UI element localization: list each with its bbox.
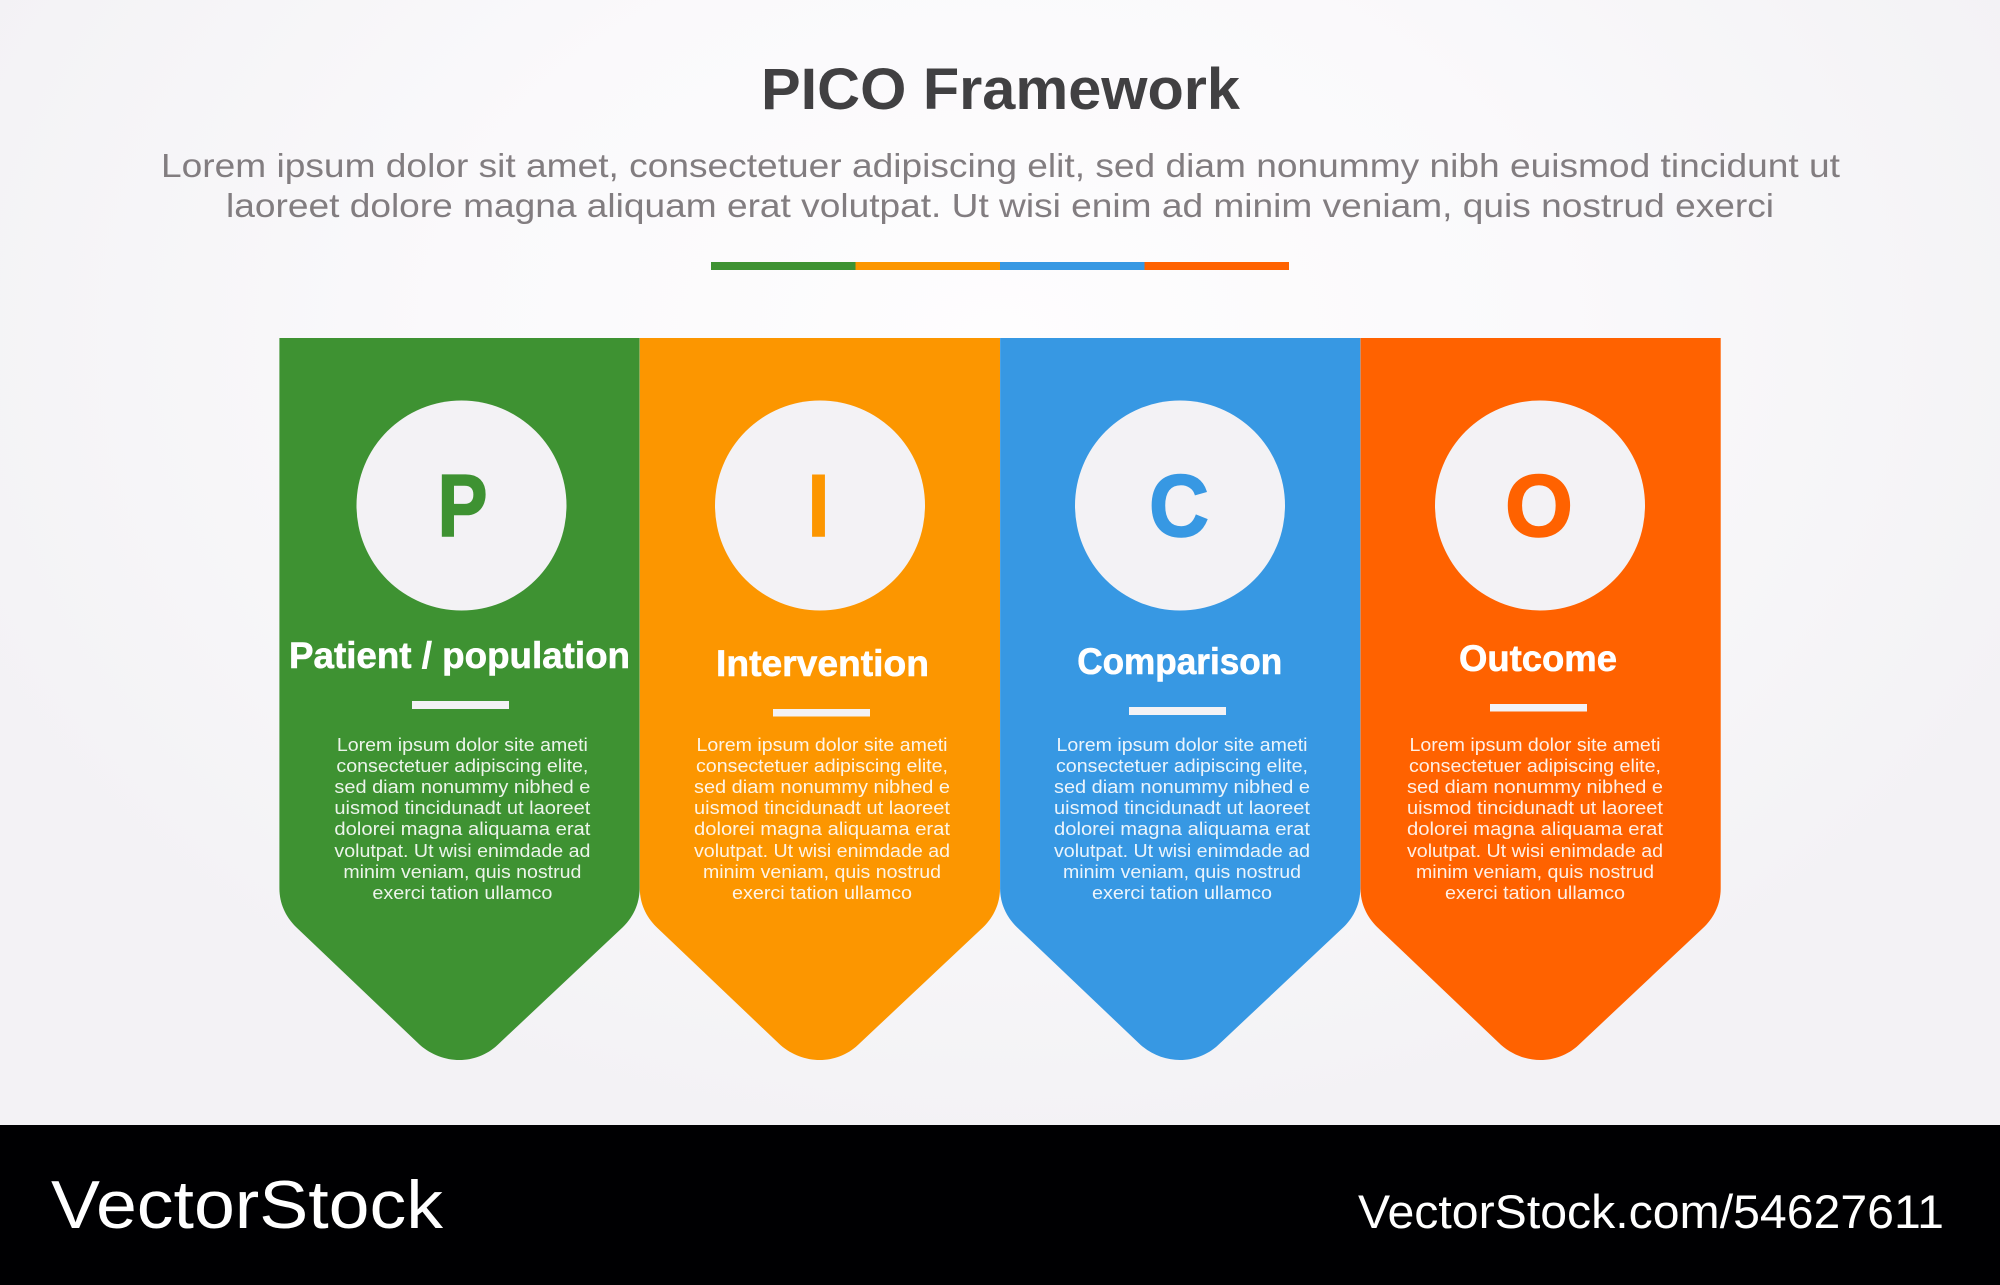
title: PICO Framework <box>761 57 1241 122</box>
heading: Patient / population: Patient / population <box>289 635 630 676</box>
body text: uismod tincidunadt ut laoreet <box>1407 798 1663 818</box>
arrow banner: red-orange <box>1360 338 1721 1060</box>
body text: sed diam nonummy nibhed e <box>694 777 950 797</box>
body text: Lorem ipsum dolor site ameti <box>337 735 588 755</box>
panel: Intervention <box>640 338 1000 1060</box>
letter: O: O <box>1505 456 1573 555</box>
subtitle text block: Lorem ipsum dolor sit amet, consectetuer adipiscing elit, sed diam nonummy nibh euismod tincidunt ut <box>161 147 1840 184</box>
body text: exerci tation ullamco <box>372 883 552 903</box>
letter circle: I <box>715 400 925 610</box>
heading rule <box>412 701 509 709</box>
panel: Patient / population <box>279 338 640 1060</box>
panel: Comparison <box>1000 338 1360 1060</box>
subtitle text block: laoreet dolore magna aliquam erat volutpat. Ut wisi enim ad minim veniam, quis nostrud exerci <box>226 187 1774 224</box>
body text <box>1407 735 1663 903</box>
body text: dolorei magna aliquama erat <box>1054 819 1310 839</box>
heading: Intervention: Intervention <box>716 643 929 684</box>
footer band <box>0 1125 2000 1285</box>
arrow banner: blue <box>1000 338 1360 1060</box>
body text: minim veniam, quis nostrud <box>343 862 581 882</box>
body text: dolorei magna aliquama erat <box>334 819 590 839</box>
body text <box>694 735 950 903</box>
body text: minim veniam, quis nostrud <box>1063 862 1301 882</box>
body text: uismod tincidunadt ut laoreet <box>334 798 590 818</box>
body text: dolorei magna aliquama erat <box>1407 819 1663 839</box>
heading: Comparison: Comparison <box>1077 641 1282 682</box>
body text: exerci tation ullamco <box>732 883 912 903</box>
body text <box>1054 735 1310 903</box>
letter circle: C <box>1075 400 1285 610</box>
body text: Lorem ipsum dolor site ameti <box>1056 735 1308 755</box>
subtitle text block <box>161 147 1840 224</box>
letter: I: I <box>808 456 830 555</box>
body text: consectetuer adipiscing elite, <box>696 756 948 776</box>
body text: uismod tincidunadt ut laoreet <box>1054 798 1310 818</box>
body text: minim veniam, quis nostrud <box>1416 862 1654 882</box>
body text: dolorei magna aliquama erat <box>694 819 950 839</box>
body text: volutpat. Ut wisi enimdade ad <box>334 841 590 861</box>
letter circle: O <box>1435 400 1645 610</box>
letter: P: P <box>438 456 488 555</box>
body text: Lorem ipsum dolor site ameti <box>1410 735 1660 755</box>
body text: consectetuer adipiscing elite, <box>336 756 588 776</box>
body text: exerci tation ullamco <box>1092 883 1272 903</box>
heading rule <box>1129 707 1226 715</box>
body text: Lorem ipsum dolor site ameti <box>696 735 948 755</box>
panel: Outcome <box>1360 338 1721 1060</box>
four-colour divider bar <box>711 262 1289 270</box>
body text: consectetuer adipiscing elite, <box>1056 756 1308 776</box>
body text: sed diam nonummy nibhed e <box>334 777 590 797</box>
body text: volutpat. Ut wisi enimdade ad <box>1054 841 1310 861</box>
arrow banner: green <box>279 338 640 1060</box>
body text <box>334 735 590 903</box>
arrow banner: orange <box>640 338 1000 1060</box>
body text: exerci tation ullamco <box>1445 883 1625 903</box>
body text: minim veniam, quis nostrud <box>703 862 941 882</box>
body text: volutpat. Ut wisi enimdade ad <box>694 841 950 861</box>
body text: sed diam nonummy nibhed e <box>1054 777 1310 797</box>
body text: sed diam nonummy nibhed e <box>1407 777 1663 797</box>
body text: volutpat. Ut wisi enimdade ad <box>1407 841 1663 861</box>
heading: Outcome: Outcome <box>1459 638 1617 679</box>
footer logo text: VectorStock <box>51 1167 444 1243</box>
letter: C: C <box>1149 456 1209 555</box>
heading rule <box>773 709 870 716</box>
letter circle: P <box>356 400 566 610</box>
body text: consectetuer adipiscing elite, <box>1409 756 1661 776</box>
body text: uismod tincidunadt ut laoreet <box>694 798 950 818</box>
footer URL text: VectorStock.com/54627611 <box>1358 1185 1944 1238</box>
heading rule <box>1490 704 1587 712</box>
